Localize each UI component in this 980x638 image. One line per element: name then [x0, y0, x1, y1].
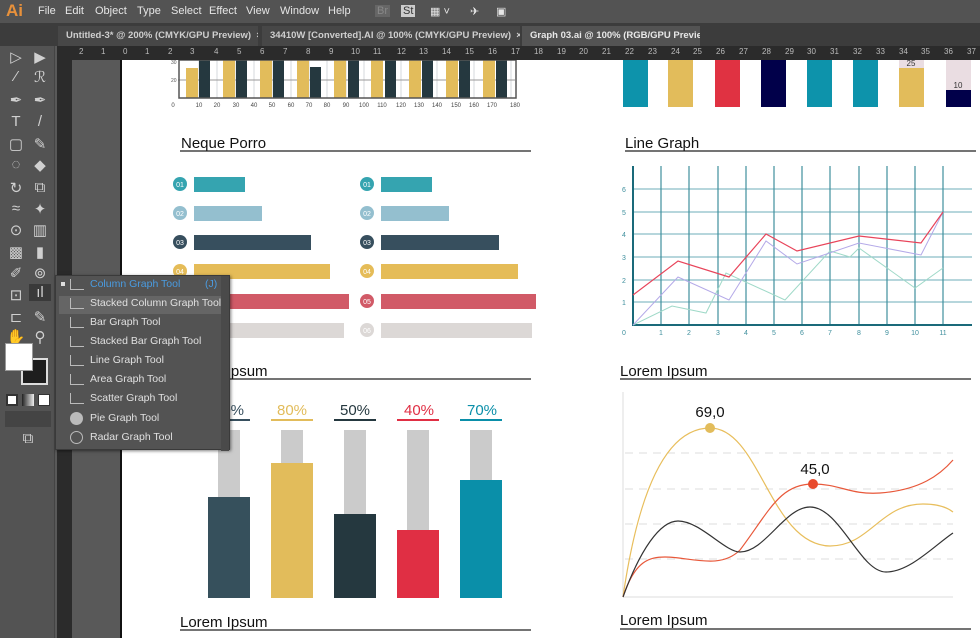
toolbar: ✒: [10, 92, 22, 109]
numbered bars left: [173, 177, 349, 338]
menu bar: [0, 0, 980, 23]
top ruler: 35: [921, 47, 930, 56]
toolbar: ⁄: [15, 68, 17, 85]
top ruler: 32: [853, 47, 862, 56]
top ruler: 6: [260, 47, 264, 56]
line graph: 2: [622, 278, 626, 285]
toolbar: ⊏: [10, 309, 22, 326]
line graph: 5: [622, 210, 626, 217]
top ruler: 11: [373, 47, 381, 56]
top ruler: 36: [944, 47, 953, 56]
menu bar: Object: [95, 5, 127, 17]
menu bar: Ai: [6, 1, 23, 20]
top ruler: 2: [168, 47, 172, 56]
menu bar: Help: [328, 5, 351, 17]
numbered bars right: [360, 177, 536, 338]
menu bar: View: [246, 5, 270, 17]
toolbar: [0, 46, 55, 638]
percentage columns: 70%: [214, 402, 244, 419]
top column chart: 40: [251, 103, 258, 109]
top right column chart: 10: [954, 81, 963, 90]
top ruler: 2: [79, 47, 83, 56]
toolbar: ↻: [10, 180, 22, 197]
menu bar: Effect: [209, 5, 237, 17]
numbered bars right: 06: [363, 328, 371, 335]
percentage columns: [208, 402, 502, 598]
top ruler: 13: [419, 47, 428, 56]
curve chart: 45,0: [800, 461, 830, 478]
popup items: Stacked Bar Graph Tool: [90, 335, 201, 347]
top ruler: 5: [237, 47, 241, 56]
line graph: 10: [911, 330, 919, 337]
toolbar: /: [38, 113, 42, 130]
toolbar: T: [11, 113, 21, 130]
heading: Lorem Ipsum bottom right: Lorem Ipsum: [620, 612, 708, 629]
numbered bars left: 04: [176, 269, 184, 276]
toolbar: ▮: [36, 244, 44, 261]
top ruler: 16: [488, 47, 497, 56]
curve chart: [623, 392, 953, 597]
top ruler: 26: [716, 47, 725, 56]
popup items: Area Graph Tool: [90, 373, 166, 385]
left ruler: [57, 60, 72, 638]
top column chart: 20: [214, 103, 221, 109]
toolbar: ▷: [10, 49, 22, 66]
top column chart: 130: [414, 103, 425, 109]
line graph: 1: [622, 300, 626, 307]
top column chart: 180: [510, 103, 521, 109]
menu bar: St: [403, 5, 413, 17]
menu bar: Window: [280, 5, 319, 17]
top ruler: 17: [511, 47, 520, 56]
top column chart: 50: [269, 103, 276, 109]
curve chart: 69,0: [695, 404, 725, 421]
menu bar: Edit: [65, 5, 84, 17]
percentage columns: 50%: [340, 402, 370, 419]
popup: graph tools menu: [55, 275, 230, 450]
numbered bars right: 04: [363, 269, 371, 276]
numbered bars left: 01: [176, 182, 184, 189]
top ruler: 4: [214, 47, 218, 56]
popup items: Bar Graph Tool: [90, 316, 160, 328]
line graph: 6: [800, 330, 804, 337]
line graph: 6: [622, 187, 626, 194]
top ruler: 7: [283, 47, 287, 56]
toolbar: ▩: [9, 244, 23, 261]
numbered bars right: 05: [363, 299, 371, 306]
line graph: 3: [622, 255, 626, 262]
top column chart: 90: [343, 103, 350, 109]
top ruler: 0: [123, 47, 127, 56]
toolbar: ⊚: [34, 265, 46, 282]
top ruler: 28: [762, 47, 771, 56]
top ruler: 34: [899, 47, 908, 56]
line graph: [622, 166, 972, 337]
line graph: 7: [828, 330, 832, 337]
top ruler: 22: [625, 47, 634, 56]
top ruler: 37: [967, 47, 976, 56]
toolbar: ⊙: [10, 222, 22, 239]
top column chart: 30: [233, 103, 240, 109]
top ruler: 31: [830, 47, 839, 56]
top ruler: 18: [534, 47, 543, 56]
top column chart: 60: [288, 103, 295, 109]
menu bar: ▣: [496, 6, 506, 18]
numbered bars right: 03: [363, 240, 371, 247]
top column chart: 120: [396, 103, 407, 109]
popup items: Column Graph Tool: [90, 278, 180, 290]
toolbar: ✋: [7, 329, 25, 346]
top column chart: 30: [171, 60, 177, 66]
toolbar: ▶: [34, 49, 46, 66]
toolbar: ⊡: [10, 287, 22, 304]
top column chart: [171, 60, 521, 109]
line graph: 4: [744, 330, 748, 337]
percentage columns: 70%: [467, 402, 497, 419]
line graph: 9: [885, 330, 889, 337]
top column chart: 0: [171, 103, 175, 109]
menu bar: ▦ ˅: [430, 6, 450, 18]
toolbar: ✦: [34, 201, 46, 218]
top ruler: 20: [579, 47, 588, 56]
top ruler: 8: [306, 47, 310, 56]
toolbar: ✐: [10, 265, 22, 282]
menu bar: ✈: [470, 6, 479, 18]
line graph: 4: [622, 232, 626, 239]
toolbar: ✎: [34, 309, 46, 326]
numbered bars right: 01: [363, 182, 371, 189]
top ruler: 24: [671, 47, 680, 56]
numbered bars right: 02: [363, 211, 371, 218]
top ruler: [57, 46, 980, 60]
top ruler: 23: [648, 47, 657, 56]
top right column chart: [623, 59, 971, 107]
line graph: 8: [857, 330, 861, 337]
percentage columns: 40%: [404, 402, 434, 419]
top column chart: 140: [432, 103, 443, 109]
line graph: 2: [687, 330, 691, 337]
top ruler: 27: [739, 47, 748, 56]
popup items: Scatter Graph Tool: [90, 392, 177, 404]
heading: Neque Porro: Neque Porro: [181, 135, 266, 152]
top ruler: 9: [329, 47, 333, 56]
menu bar: Br: [377, 5, 388, 17]
tab bar: Untitled-3* @ 200% (CMYK/GPU Preview) ×: [66, 30, 258, 41]
toolbar: ▢: [9, 136, 23, 153]
top column chart: 80: [324, 103, 331, 109]
numbered bars left: 03: [176, 240, 184, 247]
top ruler: 33: [876, 47, 885, 56]
popup items: (J): [205, 278, 217, 290]
top ruler: 29: [785, 47, 794, 56]
popup items: Stacked Column Graph Tool: [90, 297, 221, 309]
toolbar: ◆: [34, 157, 46, 174]
top ruler: 30: [807, 47, 816, 56]
top column chart: 100: [359, 103, 370, 109]
heading: Lorem Ipsum middle right: Lorem Ipsum: [620, 363, 708, 380]
top column chart: 10: [196, 103, 203, 109]
top ruler: 21: [602, 47, 611, 56]
tab bar: [0, 23, 980, 46]
menu bar: File: [38, 5, 56, 17]
toolbar: ▥: [33, 222, 47, 239]
menu bar: Select: [171, 5, 202, 17]
toolbar: ⧉: [35, 179, 45, 196]
line graph: 5: [772, 330, 776, 337]
line graph: 1: [659, 330, 663, 337]
menu bar: Type: [137, 5, 161, 17]
top ruler: 10: [351, 47, 360, 56]
heading: Lorem Ipsum bottom left: Lorem Ipsum: [180, 614, 268, 631]
top ruler: 14: [442, 47, 451, 56]
line graph: 0: [622, 330, 626, 337]
toolbar: ⚲: [34, 329, 46, 346]
line graph: 3: [716, 330, 720, 337]
heading: Lorem Ipsum middle left: Lorem Ipsum: [180, 363, 268, 380]
heading: Line Graph: Line Graph: [625, 135, 699, 152]
top ruler: 12: [397, 47, 406, 56]
popup items: Pie Graph Tool: [90, 412, 159, 424]
top ruler: 1: [145, 47, 149, 56]
toolbar: ⧉: [23, 430, 33, 447]
percentage columns: 80%: [277, 402, 307, 419]
popup items: Radar Graph Tool: [90, 431, 173, 443]
toolbar: ◌: [12, 156, 20, 173]
top column chart: 170: [487, 103, 498, 109]
popup items: [61, 278, 221, 444]
top right column chart: 25: [907, 59, 916, 68]
toolbar: ıl: [36, 284, 44, 301]
top ruler: 1: [101, 47, 105, 56]
toolbar: ≈: [12, 200, 20, 217]
toolbar: ℛ: [34, 69, 46, 86]
top ruler: 15: [465, 47, 474, 56]
top ruler: 19: [557, 47, 566, 56]
toolbar: ✎: [34, 136, 46, 153]
top column chart: 160: [469, 103, 480, 109]
top column chart: 20: [171, 78, 177, 84]
top column chart: 150: [451, 103, 462, 109]
top ruler: 3: [190, 47, 194, 56]
tab bar: 34410W [Converted].AI @ 100% (CMYK/GPU Preview) ×: [270, 30, 520, 41]
numbered bars left: 02: [176, 211, 184, 218]
line graph: 11: [939, 330, 947, 337]
top column chart: 70: [306, 103, 313, 109]
popup items: Line Graph Tool: [90, 354, 164, 366]
toolbar: ✒: [34, 92, 46, 109]
top ruler: 25: [693, 47, 702, 56]
top column chart: 110: [377, 103, 387, 109]
